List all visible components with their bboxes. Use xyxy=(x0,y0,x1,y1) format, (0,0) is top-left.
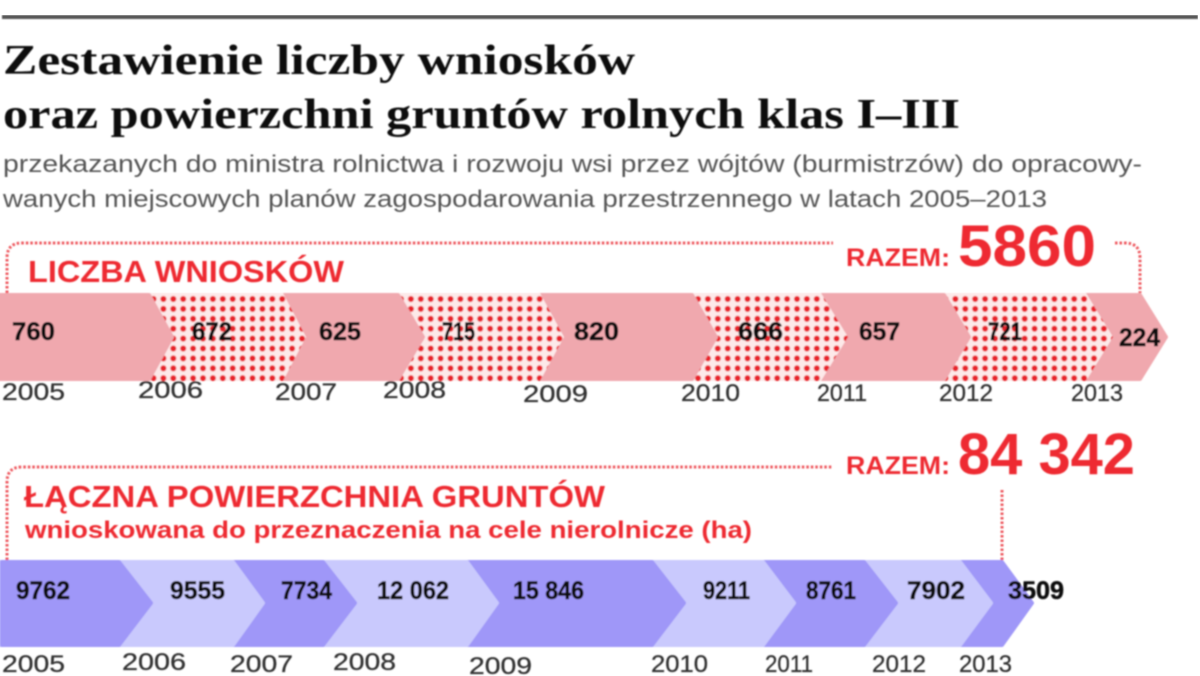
years: applications: 2010 xyxy=(681,380,740,407)
total: applications xyxy=(846,214,1096,279)
values: land area: 9555 xyxy=(170,577,225,605)
years: applications: 2005 xyxy=(2,379,65,406)
values: land area: 7734 xyxy=(281,577,332,605)
title: oraz powierzchni gruntów rolnych klas I–III xyxy=(3,92,960,138)
values: land area: 12 062 xyxy=(377,577,449,605)
values: applications: 625 xyxy=(319,318,361,346)
subtitle: przekazanych do ministra rolnictwa i rozwoju wsi przez wójtów (burmistrzów) do opracowy- xyxy=(3,151,1142,178)
years: land area xyxy=(2,649,1012,676)
total: land area: RAZEM: xyxy=(846,452,950,480)
values: applications: 760 xyxy=(12,318,55,346)
years: applications: 2011 xyxy=(817,380,867,407)
chevron timeline: applications xyxy=(0,293,1166,381)
values: land area: 8761 xyxy=(806,577,856,605)
subheading: land area: wnioskowana do przeznaczenia na cele nierolnicze (ha) xyxy=(24,517,752,544)
title xyxy=(3,38,960,138)
values: applications xyxy=(12,318,1160,352)
years: applications: 2006 xyxy=(138,377,203,404)
values: applications: 820 xyxy=(574,318,619,346)
dotted frame: land area xyxy=(7,467,1002,560)
values: applications: 672 xyxy=(192,318,232,346)
values: applications: 715 xyxy=(442,318,475,346)
values: land area: 15 846 xyxy=(513,577,584,605)
years: applications: 2009 xyxy=(523,381,588,408)
total: land area xyxy=(846,422,1135,487)
values: land area: 9211 xyxy=(703,577,750,605)
values: land area: 3509 xyxy=(1008,577,1064,605)
years: applications: 2008 xyxy=(383,377,446,404)
years: applications: 2013 xyxy=(1071,380,1123,407)
values: applications: 721 xyxy=(988,318,1022,346)
years: applications: 2007 xyxy=(275,379,337,406)
total: land area: 84 342 xyxy=(958,422,1135,487)
values: land area: 9762 xyxy=(16,577,70,605)
years: land area: 2008 xyxy=(333,649,396,676)
values: applications: 657 xyxy=(859,318,900,346)
top rule xyxy=(2,15,1198,19)
total: applications: RAZEM: xyxy=(846,244,950,272)
heading: land area: ŁĄCZNA POWIERZCHNIA GRUNTÓW xyxy=(24,478,606,514)
subtitle xyxy=(2,151,1142,213)
values: applications: 224 xyxy=(1119,324,1160,352)
dotted frame: applications xyxy=(7,243,1140,293)
subtitle: wanych miejscowych planów zagospodarowania przestrzennego w latach 2005–2013 xyxy=(2,186,1047,213)
heading: applications: LICZBA WNIOSKÓW xyxy=(28,253,345,289)
years: land area: 2006 xyxy=(122,649,186,676)
values: applications: 666 xyxy=(738,318,783,346)
panel: applications xyxy=(0,214,1166,408)
chevron timeline: land area xyxy=(0,562,1032,645)
total: applications: 5860 xyxy=(958,214,1096,279)
years: applications xyxy=(2,377,1123,408)
values: land area: 7902 xyxy=(907,577,965,605)
years: applications: 2012 xyxy=(939,380,993,407)
panel: land area xyxy=(0,422,1135,676)
values: land area xyxy=(16,577,1064,605)
title: Zestawienie liczby wniosków xyxy=(3,38,636,84)
